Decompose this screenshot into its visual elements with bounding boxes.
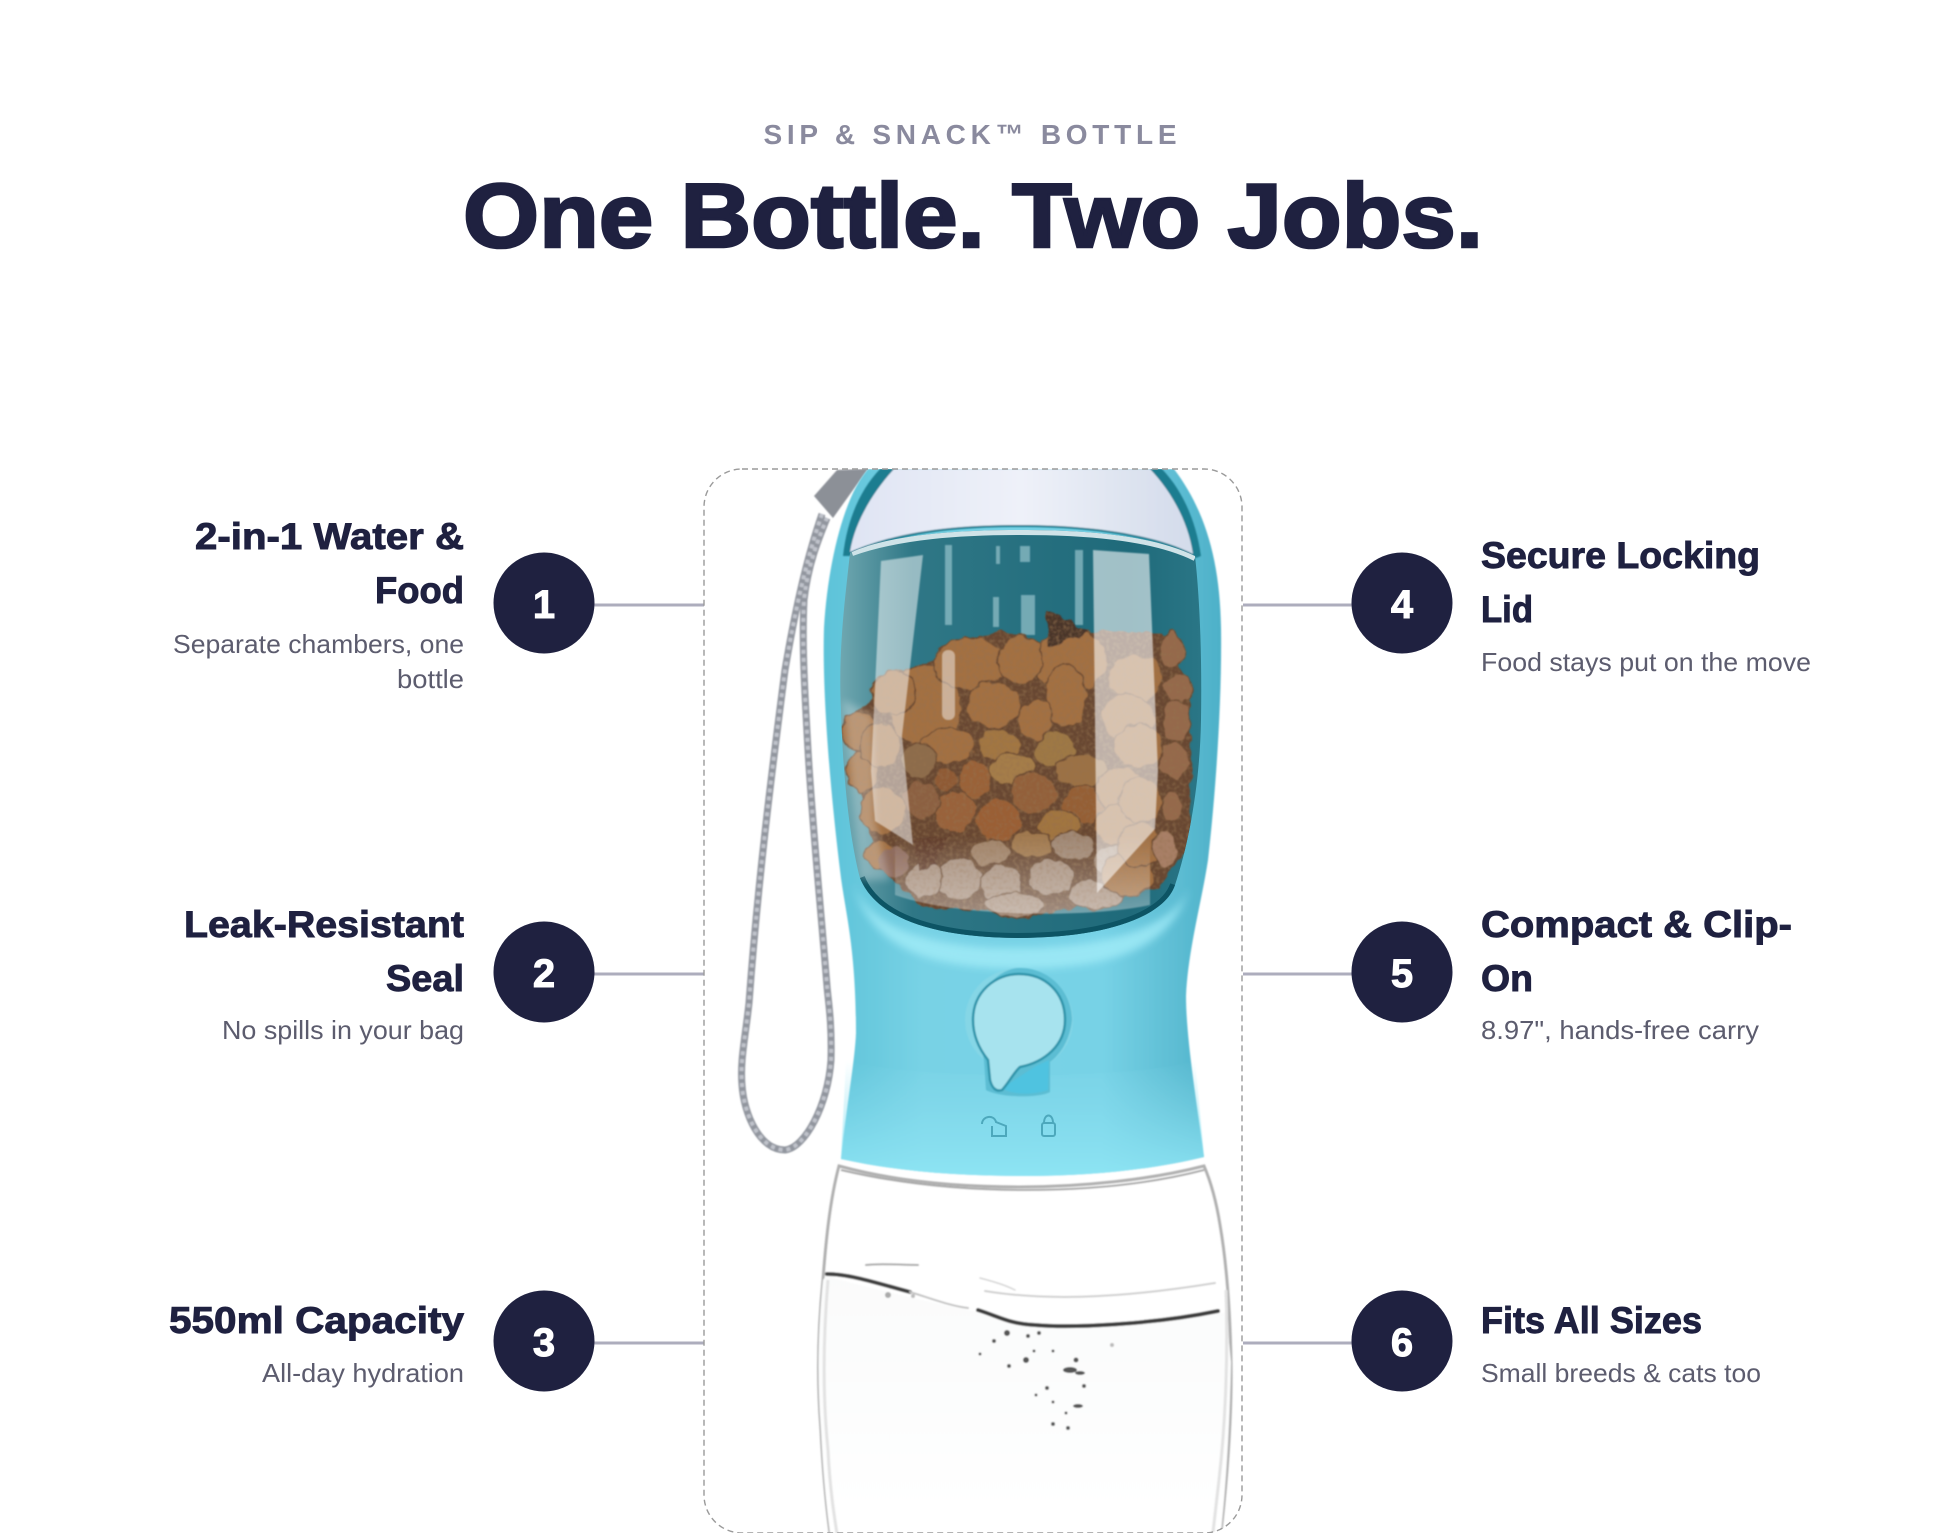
callout 4: secure locking lid (1352, 535, 1811, 677)
connector lines (590, 605, 1356, 1343)
window reflections at top (945, 545, 1083, 635)
infographic canvas (170, 124, 1810, 1533)
callout 1 text: Food (375, 570, 464, 611)
callout 6: fits all sizes (1352, 1290, 1761, 1392)
callout 4 text: Food stays put on the move (1481, 647, 1811, 677)
bottle illustration (742, 469, 1231, 1533)
dispenser button (965, 968, 1073, 1096)
callout 1: 2-in-1 water and food (173, 516, 594, 694)
water surface (827, 1264, 1218, 1326)
callout 2 text: No spills in your bag (222, 1015, 464, 1045)
number badge 1 (494, 552, 594, 654)
number badge 6: 6 (1391, 1321, 1413, 1365)
callout 2 text: Leak-Resistant (184, 904, 464, 945)
number badge 5: 5 (1391, 952, 1413, 996)
lower glass water chamber (819, 1166, 1231, 1533)
number badge 1: 1 (533, 583, 555, 627)
callout 5 text: On (1481, 958, 1533, 999)
white lid (843, 469, 1201, 558)
callout 5 text: Compact & Clip- (1481, 904, 1792, 945)
callout 2: leak-resistant seal (184, 904, 594, 1045)
number badge 5 (1352, 922, 1452, 1022)
number badge 6 (1352, 1290, 1452, 1392)
lock icons (982, 1116, 1055, 1136)
title: One Bottle. Two Jobs. (463, 166, 1483, 267)
carrying strap (742, 469, 868, 1150)
callout 6 text (1481, 1300, 1761, 1388)
kibble pile (844, 610, 1192, 917)
callout 5: compact and clip-on (1352, 904, 1792, 1045)
callout 4 text (1481, 535, 1811, 677)
dashed frame outline (704, 469, 1242, 1533)
callout 4 text: Lid (1481, 589, 1533, 630)
callout 1 text: 2-in-1 Water & (195, 516, 464, 557)
callout 3 text (169, 1300, 464, 1388)
blue silicone shell (824, 469, 1221, 1176)
number badge 2 (494, 922, 594, 1022)
callout 4 text: Secure Locking (1481, 535, 1760, 576)
callout 3: 550ml capacity (169, 1290, 594, 1392)
glass reflection bands (843, 550, 1158, 914)
callout 1 text: Separate chambers, one (173, 629, 464, 659)
callout 1 text (173, 516, 464, 694)
callout 5 text: 8.97", hands-free carry (1481, 1015, 1759, 1045)
callout 6 text: Fits All Sizes (1481, 1300, 1702, 1341)
callout 6 text: Small breeds & cats too (1481, 1358, 1761, 1388)
callout 2 text (184, 904, 464, 1045)
callout 3 text: All-day hydration (262, 1358, 464, 1388)
food window (840, 530, 1201, 938)
callout 1 text: bottle (397, 664, 464, 694)
number badge 2: 2 (533, 952, 555, 996)
number badge 4: 4 (1391, 583, 1414, 627)
eyebrow label: SIP & SNACK™ BOTTLE (764, 119, 1176, 150)
number badge 3 (494, 1290, 594, 1392)
callout 5 text (1481, 904, 1792, 1045)
number badge 3: 3 (533, 1321, 555, 1365)
panel: bottle photo frame (704, 469, 1242, 1533)
callout 2 text: Seal (386, 958, 464, 999)
number badge 4 (1352, 552, 1452, 654)
bubbles (885, 1292, 1114, 1430)
callout 3 text: 550ml Capacity (169, 1300, 464, 1341)
